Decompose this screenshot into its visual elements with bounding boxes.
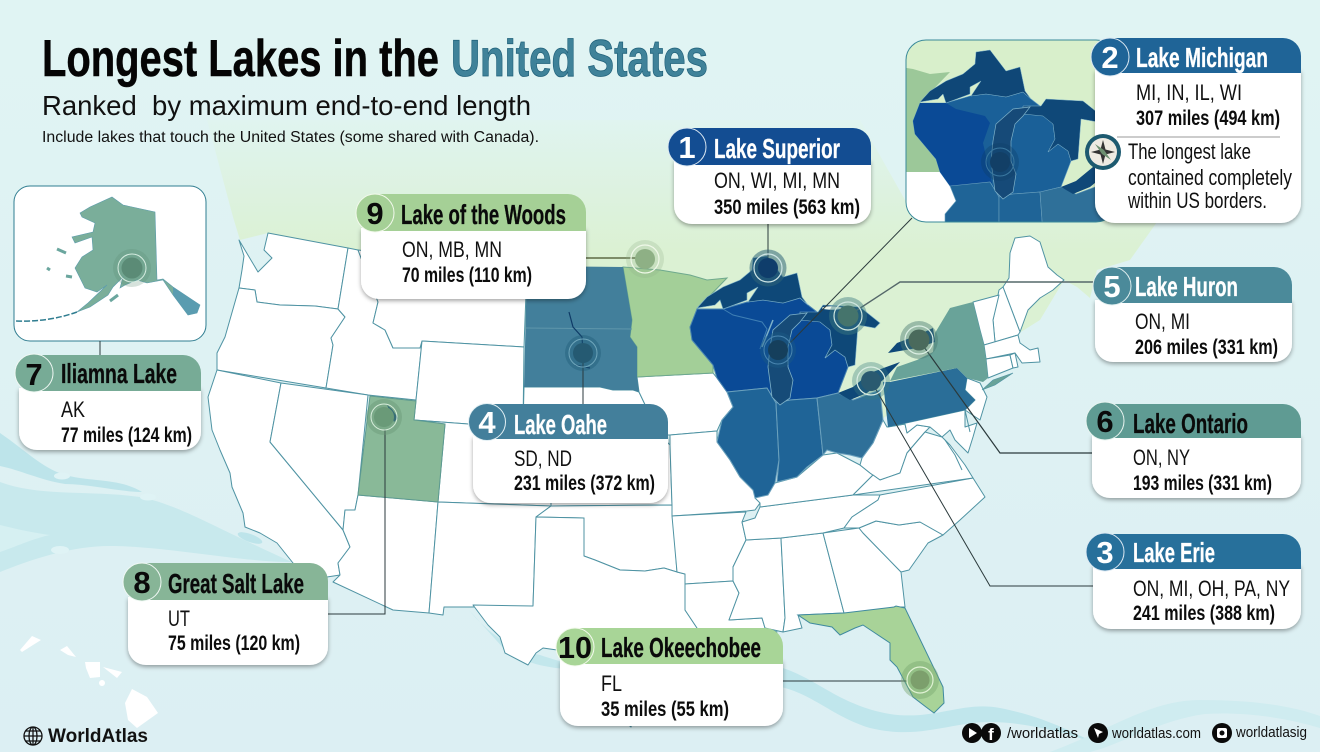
icon: globe [24, 727, 42, 745]
card: Lake Superior: Lake Superior [714, 133, 840, 164]
card: Lake Okeechobee: 35 miles (55 km) [601, 698, 729, 721]
icon: compass [1085, 134, 1121, 170]
subtitle: Ranked by maximum end-to-end length [42, 90, 531, 121]
marker: Lake Okeechobee [901, 661, 939, 699]
marker: Lake Huron [829, 297, 867, 335]
inset map shapes [906, 50, 1104, 222]
Florida [798, 606, 944, 713]
title: Longest Lakes in the [42, 30, 439, 88]
card: Lake Oahe: 231 miles (372 km) [514, 472, 655, 495]
card: Lake Erie: Lake Erie [1133, 537, 1215, 568]
marker: Lake Oahe [565, 335, 601, 371]
Illinois [717, 388, 779, 498]
western states [208, 233, 700, 727]
marker: Lake Superior [750, 250, 786, 286]
social links [962, 723, 1307, 744]
Lake Superior [697, 256, 808, 309]
Minnesota [623, 267, 727, 377]
card: Lake Erie [1086, 533, 1301, 629]
social links: /worldatlas [1007, 725, 1078, 742]
card: Lake Superior: 350 miles (563 km) [714, 196, 860, 219]
icon: facebook: f [988, 725, 994, 744]
card: Lake Oahe: Lake Oahe [514, 409, 607, 440]
background waves [0, 433, 1320, 752]
Hawaii islands [20, 636, 158, 728]
card: Lake Ontario: ON, NY [1133, 445, 1190, 470]
Utah [358, 396, 445, 502]
Ohio [817, 390, 883, 458]
Lake Erie [838, 362, 900, 400]
card: Great Salt Lake: 75 miles (120 km) [168, 632, 300, 655]
note: Include lakes that touch the United States (some shared with Canada). [42, 129, 539, 146]
logo: WorldAtlas: WorldAtlas [48, 726, 148, 747]
card: Lake Huron: Lake Huron [1135, 271, 1238, 302]
card: Iliamna Lake: 77 miles (124 km) [61, 424, 192, 447]
New England states [973, 236, 1064, 378]
social links: worldatlasig [1235, 724, 1307, 741]
Lake Michigan [768, 313, 807, 405]
card: Lake Superior: 1 [678, 130, 696, 165]
icon: instagram [1212, 723, 1232, 743]
card: Lake Superior [668, 128, 871, 224]
New York [890, 302, 1013, 390]
card: Lake Michigan [1085, 38, 1301, 223]
Great Salt Lake water [387, 405, 398, 422]
card: Lake Superior: ON, WI, MI, MN [714, 168, 840, 193]
card: Lake Erie: 241 miles (388 km) [1133, 602, 1275, 625]
card: Lake Michigan: within US borders. [1127, 188, 1267, 213]
card: Iliamna Lake: 7 [25, 357, 43, 392]
card: Lake of the Woods: 9 [366, 196, 384, 231]
title highlight: United States [451, 30, 708, 88]
card: Lake Huron: ON, MI [1135, 309, 1190, 334]
Alaska shape [15, 197, 200, 321]
Pennsylvania [883, 368, 975, 427]
card: Lake Oahe [468, 404, 668, 503]
card: Lake Michigan: 2 [1101, 40, 1119, 75]
card: Lake Ontario: 193 miles (331 km) [1133, 472, 1272, 495]
Lake Huron [800, 305, 880, 367]
card: Lake Ontario [1086, 402, 1301, 498]
card: Iliamna Lake: Iliamna Lake [61, 358, 177, 389]
Lake Ontario [888, 328, 935, 353]
marker: Great Salt Lake [366, 399, 402, 435]
card: Lake Huron: 206 miles (331 km) [1135, 336, 1278, 359]
card: Lake Oahe: SD, ND [514, 446, 572, 471]
card: Lake Huron [1093, 267, 1292, 362]
social links: worldatlas.com [1111, 725, 1201, 742]
card: Iliamna Lake: AK [61, 397, 85, 422]
card: Lake of the Woods: ON, MB, MN [402, 237, 502, 262]
card: Lake Okeechobee: FL [601, 671, 622, 696]
central and southern states [637, 373, 987, 640]
card: Great Salt Lake [123, 563, 328, 665]
card: Lake Okeechobee: 10 [558, 630, 592, 665]
Wisconsin and Michigan [690, 298, 848, 403]
card: Lake Ontario: 6 [1096, 404, 1114, 439]
inset: Lake Michigan region map [906, 40, 1106, 222]
icon: cursor [1088, 723, 1108, 743]
card: Great Salt Lake: 8 [133, 565, 151, 600]
card: Iliamna Lake [15, 354, 201, 450]
card: Lake Huron: 5 [1103, 269, 1121, 304]
marker: Lake Michigan [760, 332, 796, 368]
inset: Alaska map [14, 186, 206, 341]
card: Lake Michigan: The longest lake [1128, 139, 1251, 164]
Iliamna Lake marker [113, 249, 151, 287]
card: Lake Michigan: 307 miles (494 km) [1136, 107, 1280, 130]
card: Great Salt Lake: Great Salt Lake [168, 568, 304, 599]
marker: Lake Erie [852, 362, 890, 400]
card: Lake of the Woods [356, 194, 586, 299]
card: Lake of the Woods: Lake of the Woods [401, 199, 566, 230]
Canada land [207, 120, 1157, 420]
icon: video [962, 723, 982, 743]
card: Lake Oahe: 4 [478, 405, 496, 440]
card: Great Salt Lake: UT [168, 606, 190, 631]
card: Lake Okeechobee: Lake Okeechobee [601, 632, 761, 663]
card: Lake Erie: 3 [1096, 535, 1114, 570]
card: Lake Michigan: MI, IN, IL, WI [1136, 80, 1242, 105]
card: Lake Ontario: Lake Ontario [1133, 408, 1248, 439]
inset lake marker [981, 143, 1019, 181]
Dakotas [524, 266, 639, 392]
Indiana [776, 398, 823, 482]
leader lines [100, 218, 1095, 681]
marker: Lake Ontario [900, 321, 938, 359]
card: Lake of the Woods: 70 miles (110 km) [402, 264, 532, 287]
card: Lake Okeechobee [556, 628, 783, 726]
map of the United States [208, 233, 1064, 727]
title block [42, 30, 708, 146]
marker: Lake of the Woods [626, 240, 664, 278]
icon: facebook [981, 723, 1001, 744]
